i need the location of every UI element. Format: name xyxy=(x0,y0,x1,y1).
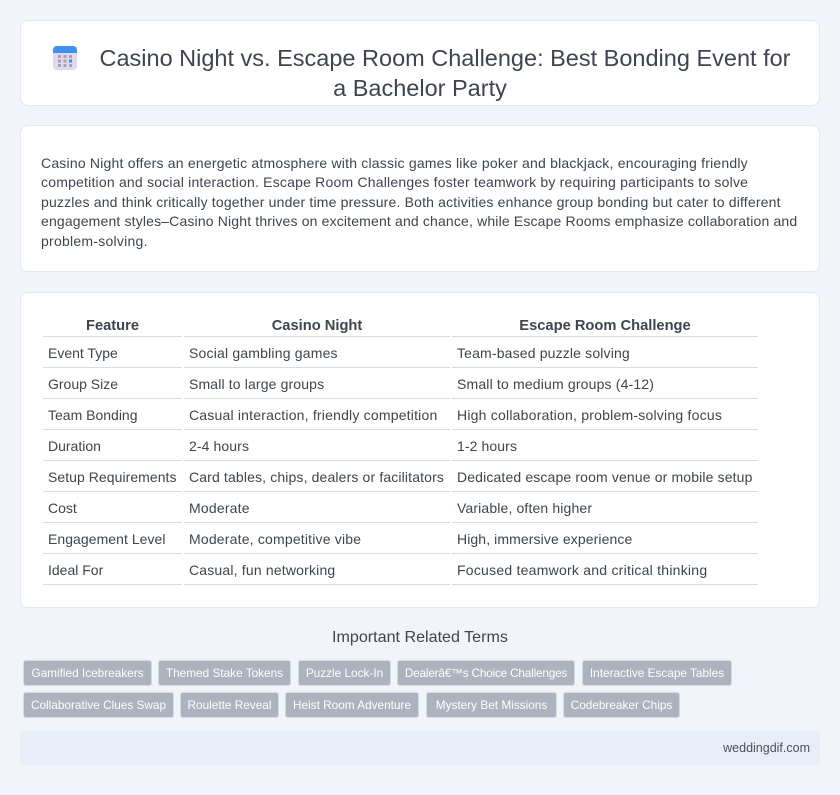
tag: Gamified Icebreakers xyxy=(31,666,144,680)
row: Duration: Duration xyxy=(48,438,101,454)
row: Event Type: Team-based puzzle solving xyxy=(457,345,630,361)
row: Cost: Moderate xyxy=(189,500,250,516)
footer bar xyxy=(20,731,820,765)
row: Engagement Level: High, immersive experience xyxy=(457,531,632,547)
row: Cost: Cost xyxy=(48,500,77,516)
row: Ideal For xyxy=(48,562,707,578)
row: Setup Requirements: Card tables, chips, dealers or facilitators xyxy=(189,469,444,485)
tag xyxy=(426,692,557,718)
row: Event Type xyxy=(48,345,630,361)
footer credit: weddingdif.com xyxy=(723,741,810,755)
tag xyxy=(298,660,391,686)
tag: Interactive Escape Tables xyxy=(590,666,724,680)
row: Ideal For: Focused teamwork and critical thinking xyxy=(457,562,707,578)
tag: Collaborative Clues Swap xyxy=(31,698,166,712)
tag xyxy=(180,692,279,718)
row: Engagement Level: Engagement Level xyxy=(48,531,166,547)
intro paragraph: engagement styles–Casino Night thrives on excitement and chance, while Escape Rooms emphasize collaboration and xyxy=(41,213,797,229)
table header row: Feature xyxy=(86,318,139,334)
tag xyxy=(397,660,575,686)
header panel xyxy=(20,20,820,106)
row: Setup Requirements xyxy=(48,469,753,485)
intro paragraph: competition and social interaction. Escape Room Challenges foster teamwork by requiring participants to solve xyxy=(41,174,748,190)
table header row xyxy=(86,318,691,334)
row: Cost xyxy=(48,500,592,516)
tag: Heist Room Adventure xyxy=(293,698,411,712)
tag xyxy=(158,660,291,686)
tag: Mystery Bet Missions xyxy=(436,698,547,712)
row: Event Type: Event Type xyxy=(48,345,118,361)
tag: Roulette Reveal xyxy=(188,698,271,712)
row: Ideal For: Casual, fun networking xyxy=(189,562,335,578)
row: Team Bonding: Team Bonding xyxy=(48,407,138,423)
related terms tags xyxy=(23,660,732,718)
comparison table panel xyxy=(20,292,820,608)
table header row: Escape Room Challenge xyxy=(519,318,691,334)
row: Duration: 1-2 hours xyxy=(457,438,517,454)
intro text panel xyxy=(20,125,820,272)
row: Group Size: Small to large groups xyxy=(189,376,324,392)
comparison table xyxy=(43,318,758,585)
row: Duration: 2-4 hours xyxy=(189,438,249,454)
row: Team Bonding: Casual interaction, friendly competition xyxy=(189,407,437,423)
tag: Codebreaker Chips xyxy=(571,698,672,712)
row: Ideal For: Ideal For xyxy=(48,562,103,578)
row: Duration xyxy=(48,438,517,454)
row: Group Size: Small to medium groups (4-12) xyxy=(457,376,654,392)
row: Setup Requirements: Dedicated escape room venue or mobile setup xyxy=(457,469,753,485)
title xyxy=(99,45,790,101)
row: Engagement Level: Moderate, competitive vibe xyxy=(189,531,361,547)
related terms heading: Important Related Terms xyxy=(332,628,508,646)
tag xyxy=(23,692,174,718)
intro paragraph: puzzles and think critically together under time pressure. Both activities enhance group bonding but cater to different xyxy=(41,194,781,210)
title: a Bachelor Party xyxy=(333,75,507,101)
row: Group Size: Group Size xyxy=(48,376,118,392)
tag: Dealerâ€™s Choice Challenges xyxy=(405,666,567,680)
tag: Puzzle Lock-In xyxy=(306,666,383,680)
intro paragraph xyxy=(41,154,797,249)
tag xyxy=(563,692,680,718)
row: Engagement Level xyxy=(48,531,632,547)
tag xyxy=(285,692,419,718)
intro paragraph: Casino Night offers an energetic atmosphere with classic games like poker and blackjack, encouraging friendly xyxy=(41,154,748,170)
tag xyxy=(23,660,152,686)
row: Setup Requirements: Setup Requirements xyxy=(48,469,177,485)
table header row: Casino Night xyxy=(272,318,362,334)
tag xyxy=(582,660,732,686)
row: Group Size xyxy=(48,376,654,392)
row: Event Type: Social gambling games xyxy=(189,345,338,361)
icon: calendar xyxy=(53,46,77,70)
row: Team Bonding xyxy=(48,407,722,423)
intro paragraph: problem-solving. xyxy=(41,233,148,249)
row: Cost: Variable, often higher xyxy=(457,500,592,516)
tag: Themed Stake Tokens xyxy=(166,666,283,680)
title: Casino Night vs. Escape Room Challenge: Best Bonding Event for xyxy=(99,45,790,71)
row: Team Bonding: High collaboration, problem-solving focus xyxy=(457,407,722,423)
